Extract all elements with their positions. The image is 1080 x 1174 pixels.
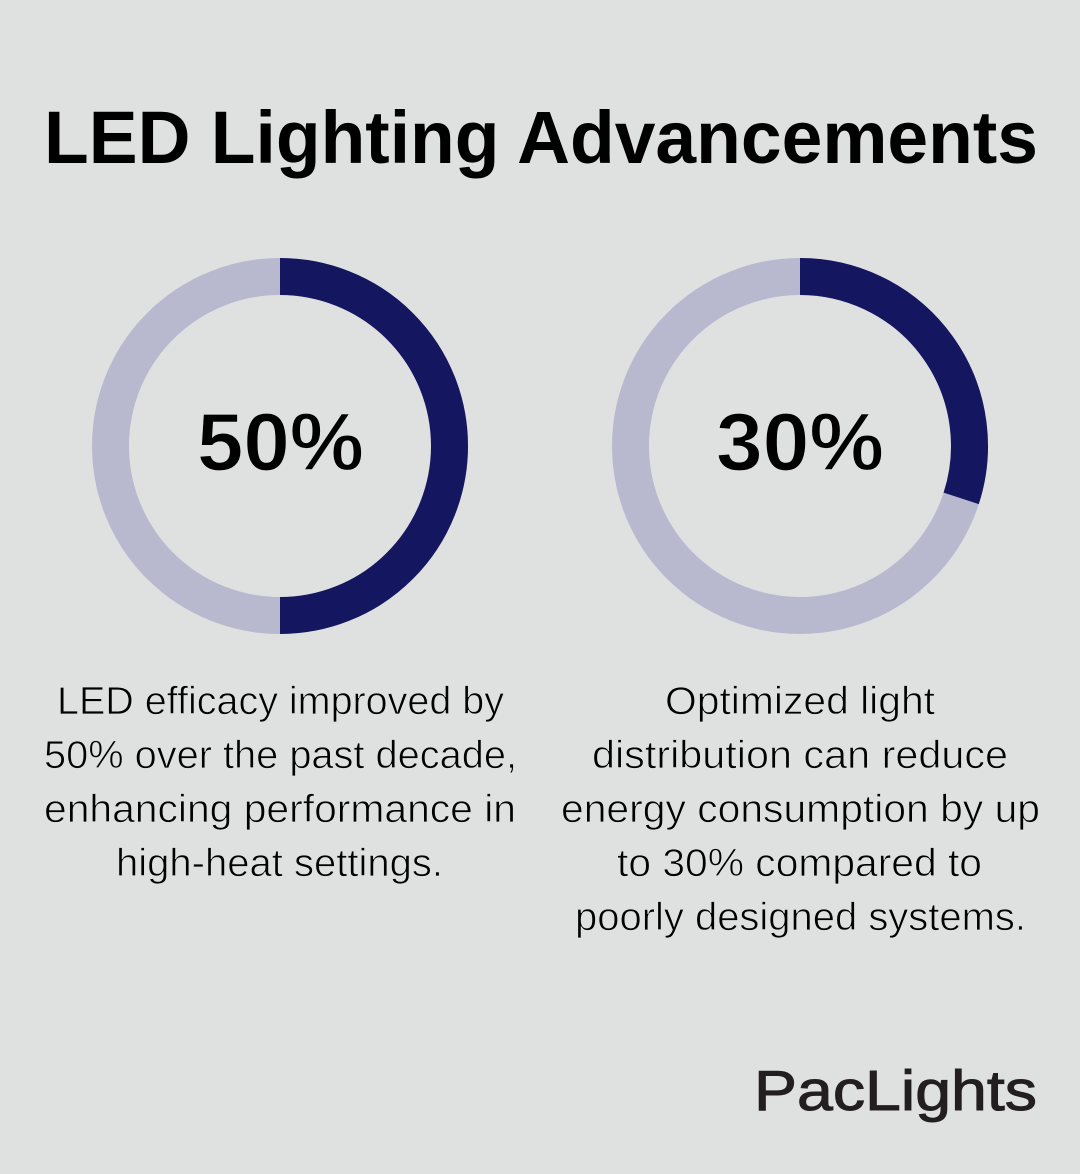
- panel: LED efficacy stat: [44, 276, 517, 885]
- donut chart: 30%: [630, 276, 970, 616]
- stat value: 30%: 30%: [716, 397, 884, 488]
- title: LED Lighting Advancements: [44, 96, 1038, 179]
- description: light distribution: Optimized light: [665, 680, 935, 723]
- description: LED efficacy: LED efficacy improved by: [57, 680, 504, 723]
- description: light distribution: to 30% compared to: [617, 842, 982, 885]
- description: light distribution: energy consumption by up: [561, 788, 1040, 831]
- description: light distribution: [561, 680, 1040, 939]
- donut chart: 50%: [110, 276, 450, 616]
- description: LED efficacy: enhancing performance in: [44, 788, 516, 831]
- description: LED efficacy: high-heat settings.: [116, 842, 443, 885]
- description: LED efficacy: 50% over the past decade,: [44, 734, 517, 777]
- description: light distribution: poorly designed systems.: [575, 896, 1026, 939]
- panel: light distribution stat: [561, 276, 1040, 939]
- stat value: 50%: 50%: [197, 397, 364, 488]
- description: LED efficacy: [44, 680, 517, 885]
- description: light distribution: distribution can reduce: [592, 734, 1008, 777]
- logo: PacLights: PacLights: [754, 1059, 1037, 1123]
